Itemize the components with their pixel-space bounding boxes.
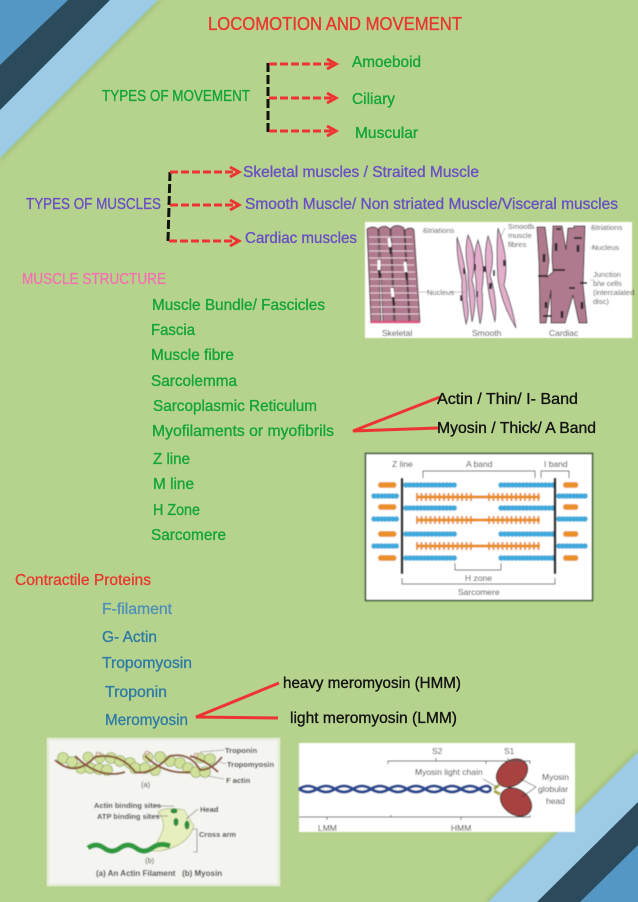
actin strand [58, 752, 216, 778]
list: muscle types: Smooth Muscle/ Non striated Muscle/Visceral muscles [245, 196, 618, 213]
thick filaments [381, 485, 578, 558]
list: contractile proteins: F-filament [102, 601, 173, 618]
diagram: actin filament and myosin: Troponin [225, 746, 257, 755]
diagram: skeletal, smooth and cardiac muscle: (intercalated [593, 288, 634, 297]
list: muscle structure: Sarcoplasmic Reticulum [153, 398, 317, 415]
diagram: myosin molecule: head [546, 796, 565, 806]
list: contractile proteins: Tropomyosin [102, 655, 192, 672]
diagram: skeletal, smooth and cardiac muscle: Skeletal [382, 328, 412, 338]
heading: muscle structure: MUSCLE STRUCTURE [22, 271, 166, 288]
diagram: skeletal, smooth and cardiac muscle: b/w cells [593, 279, 622, 288]
diagram: myosin molecule: globular [538, 784, 568, 794]
list: muscle structure: Muscle Bundle/ Fascicles [152, 297, 325, 314]
diagram: skeletal, smooth and cardiac muscle: Striations [591, 223, 623, 232]
list: muscle structure: H Zone [153, 502, 200, 519]
labels: meromyosin types: heavy meromyosin (HMM) [283, 675, 461, 692]
diagram: myosin molecule: S1 [504, 746, 515, 756]
diagram: skeletal, smooth and cardiac muscle: Striations [423, 226, 455, 235]
diagram: sarcomere: A band [466, 459, 493, 469]
list: contractile proteins: Troponin [105, 684, 167, 701]
list: contractile proteins [102, 601, 192, 729]
arrows: types of movement [268, 59, 336, 136]
list: muscle structure: Myofilaments or myofibrils [152, 423, 334, 440]
diagram: myosin molecule: Myosin [542, 772, 569, 782]
list: muscle structure: M line [153, 476, 194, 493]
diagram: sarcomere: Sarcomere [458, 587, 500, 597]
list: muscle structure: Z line [153, 451, 190, 468]
diagram: myosin molecule: HMM [451, 823, 471, 833]
list: movement types: Ciliary [352, 91, 395, 108]
skeletal fibres [367, 226, 420, 322]
list: muscle types: Cardiac muscles [245, 230, 357, 247]
list: muscle structure: Sarcomere [151, 527, 226, 544]
list: movement types: Amoeboid [352, 54, 421, 71]
diagram: skeletal, smooth and cardiac muscle [365, 222, 634, 338]
diagram: myosin molecule: LMM [318, 823, 337, 833]
scale lines [299, 758, 530, 820]
diagram: actin filament and myosin: ATP binding sites [97, 812, 160, 821]
list: contractile proteins: G- Actin [102, 629, 157, 646]
diagram: skeletal, smooth and cardiac muscle: Smooth [508, 222, 534, 231]
list: muscle structure [151, 297, 334, 544]
labels: meromyosin types: light meromyosin (LMM) [290, 710, 457, 727]
diagram: sarcomere: H zone [465, 573, 492, 583]
diagram: sarcomere: Z line [392, 459, 413, 469]
list: muscle structure: Muscle fibre [151, 347, 234, 364]
decoration: top-left corner stripes [0, 0, 162, 162]
diagram: skeletal, smooth and cardiac muscle: disc) [593, 297, 609, 306]
heading: types of movement: TYPES OF MOVEMENT [102, 88, 250, 105]
list: contractile proteins: Meromyosin [105, 712, 188, 729]
diagram: myosin molecule [299, 743, 575, 833]
diagram: skeletal, smooth and cardiac muscle: muscle [508, 231, 532, 240]
connector: meromyosin [196, 683, 279, 718]
diagram: actin filament and myosin: Actin binding sites [94, 801, 161, 810]
diagram: sarcomere: I band [544, 459, 568, 469]
brackets [402, 471, 569, 584]
diagram: actin filament and myosin [47, 738, 280, 886]
diagram: skeletal, smooth and cardiac muscle: fibres [508, 240, 527, 249]
diagram: actin filament and myosin: (b) [145, 856, 155, 865]
diagram: actin filament and myosin: Cross arm [199, 830, 236, 839]
cardiac fibres [537, 226, 587, 323]
smooth fibres [457, 228, 516, 328]
diagram: actin filament and myosin: F actin [226, 776, 251, 785]
diagram: myosin molecule: S2 [432, 746, 443, 756]
diagram: actin filament and myosin: (a) An Actin Filament (b) Myosin [96, 869, 222, 878]
list: muscle types [243, 164, 618, 247]
heads [491, 753, 537, 822]
connector: myofilaments [353, 397, 440, 431]
thin filaments [374, 485, 585, 558]
list: muscle types: Skeletal muscles / Straited Muscle [243, 164, 479, 181]
diagram: skeletal, smooth and cardiac muscle: Nucleus [592, 243, 619, 252]
labels [417, 228, 594, 292]
labels: myofilament types [437, 391, 596, 437]
diagram: skeletal, smooth and cardiac muscle: Cardiac [549, 328, 579, 338]
diagram: actin filament and myosin: Head [200, 805, 219, 814]
z lines [402, 478, 555, 574]
diagram: skeletal, smooth and cardiac muscle: Nucleus [427, 288, 454, 297]
heading: types of muscles: TYPES OF MUSCLES [26, 196, 161, 213]
title: LOCOMOTION AND MOVEMENT [208, 14, 462, 34]
list: movement types: Muscular [355, 125, 419, 142]
labels: myofilament types: Myosin / Thick/ A Band [437, 420, 596, 437]
heading: contractile proteins: Contractile Proteins [15, 572, 151, 589]
diagram: actin filament and myosin: (a) [141, 780, 151, 789]
list: movement types [352, 54, 421, 142]
labels: myofilament types: Actin / Thin/ I- Band [437, 391, 578, 408]
diagram: actin filament and myosin: Tropomyosin [227, 760, 275, 769]
list: muscle structure: Fascia [151, 322, 195, 339]
labels: meromyosin types [283, 675, 461, 727]
list: muscle structure: Sarcolemma [151, 373, 237, 390]
myosin [152, 808, 194, 851]
diagram: sarcomere [366, 454, 592, 600]
arrows: types of muscles [168, 167, 239, 246]
tail [299, 786, 491, 792]
diagram: skeletal, smooth and cardiac muscle: Smooth [472, 328, 502, 338]
diagram: myosin molecule: Myosin light chain [415, 767, 483, 777]
diagram: skeletal, smooth and cardiac muscle: Junction [593, 270, 621, 279]
decoration: bottom-right corner stripes [484, 748, 638, 902]
